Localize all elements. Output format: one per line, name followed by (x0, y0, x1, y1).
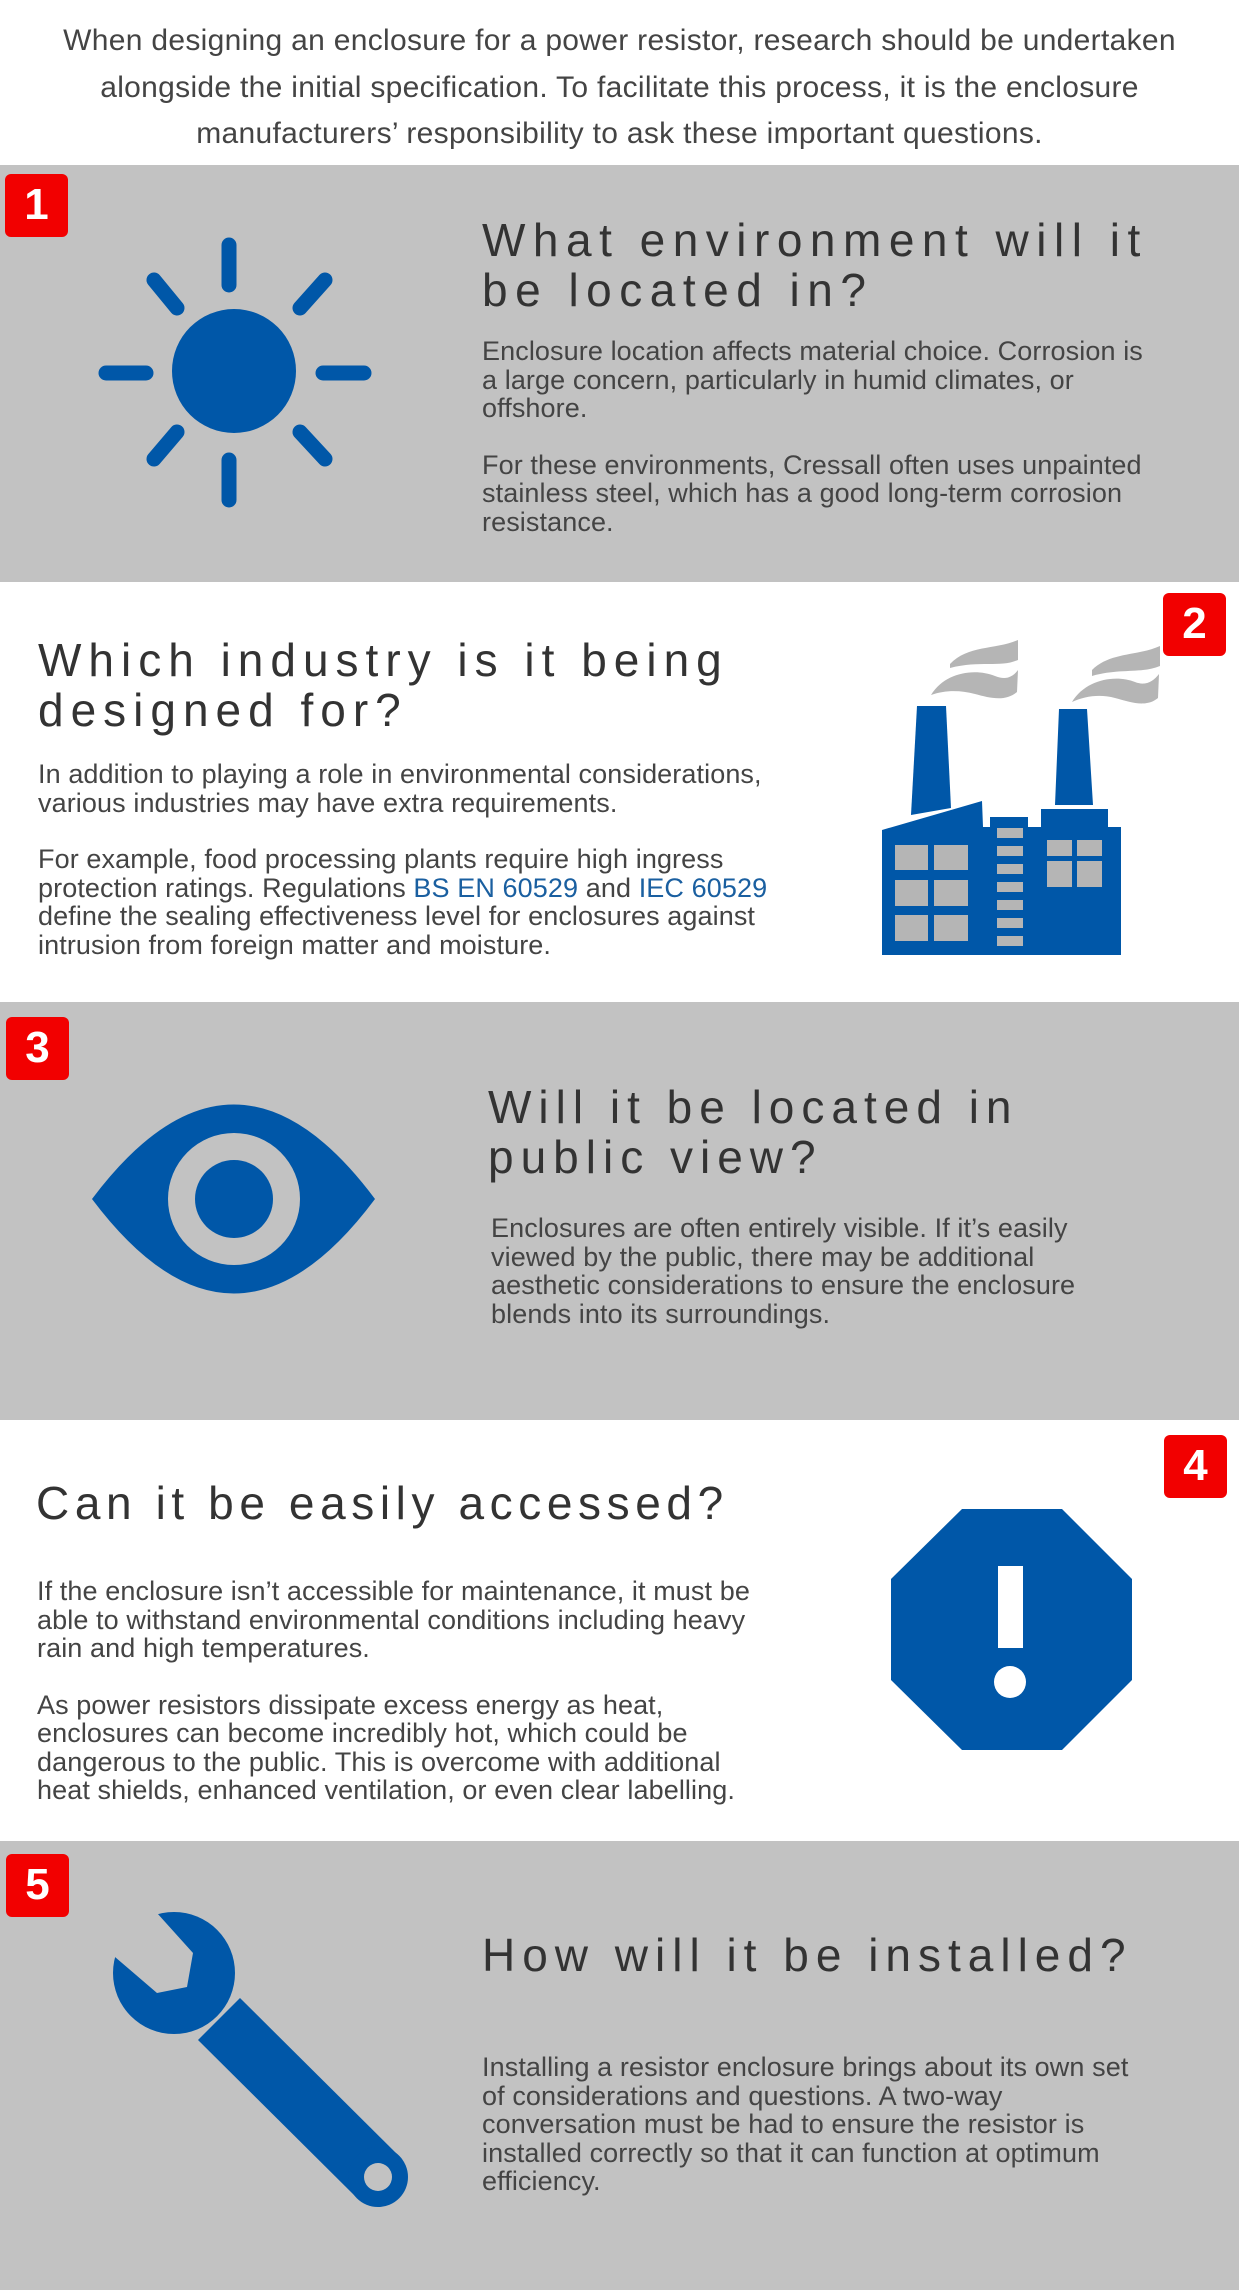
badge 5: 5 (25, 1860, 50, 1909)
intro text (63, 24, 1176, 150)
body text 1 (482, 336, 1143, 536)
heading 3: Will it be located in (488, 1081, 1018, 1133)
panel: access (36, 1435, 1227, 1805)
body text 1: stainless steel, which has a good long-term corrosion (482, 478, 1122, 508)
body text 5: of considerations and questions. A two-way (482, 2080, 1003, 2110)
icon: wrench (113, 1912, 408, 2207)
heading 1: What environment will it (482, 214, 1148, 266)
body text 2: For example, food processing plants require high ingress (38, 844, 723, 874)
body text 2: define the sealing effectiveness level for enclosures against (38, 901, 755, 931)
heading 3 (488, 1081, 1018, 1183)
body text 4: If the enclosure isn’t accessible for maintenance, it must be (37, 1576, 750, 1606)
body text 1: a large concern, particularly in humid climates, or (482, 364, 1074, 394)
body text 1: Enclosure location affects material choice. Corrosion is (482, 336, 1143, 366)
intro text: alongside the initial specification. To facilitate this process, it is the enclosure (100, 70, 1139, 104)
heading 2: Which industry is it being (38, 634, 729, 686)
body text 5: installed correctly so that it can function at optimum (482, 2138, 1100, 2168)
panel: public view (0, 1002, 1239, 1420)
body text 4: dangerous to the public. This is overcome with additional (37, 1746, 721, 1776)
body text 5: Installing a resistor enclosure brings about its own set (482, 2052, 1128, 2082)
intro text: manufacturers’ responsibility to ask these important questions. (196, 117, 1043, 150)
panel: installation (0, 1841, 1239, 2290)
body text 2: In addition to playing a role in environmental considerations, (38, 759, 762, 789)
heading 2 (38, 634, 729, 736)
body text 2: intrusion from foreign matter and moisture. (38, 930, 551, 960)
body text 3: Enclosures are often entirely visible. If it’s easily (491, 1213, 1068, 1243)
body text 5: efficiency. (482, 2166, 601, 2196)
badge 5 (6, 1854, 69, 1917)
intro text: When designing an enclosure for a power resistor, research should be undertaken (63, 24, 1176, 57)
icon: factory (882, 640, 1160, 955)
icon: warning octagon (891, 1509, 1132, 1750)
badge 3: 3 (25, 1023, 50, 1072)
body text 1: For these environments, Cressall often uses unpainted (482, 450, 1142, 480)
badge 4: 4 (1183, 1441, 1208, 1490)
badge 1: 1 (24, 180, 49, 229)
heading 5: How will it be installed? (482, 1929, 1133, 1981)
body text 4 (37, 1576, 750, 1805)
badge 4 (1164, 1435, 1227, 1498)
body text 1: resistance. (482, 506, 614, 536)
body text 3: blends into its surroundings. (491, 1298, 830, 1328)
body text 4: able to withstand environmental conditions including heavy (37, 1604, 745, 1634)
heading 3: public view? (488, 1131, 823, 1183)
panel: industry (38, 593, 1226, 960)
heading 1: be located in? (482, 264, 873, 316)
icon: eye (92, 1104, 375, 1294)
body text 2: protection ratings. Regulations BS EN 60529 and IEC 60529 (38, 872, 767, 902)
body text 4: enclosures can become incredibly hot, which could be (37, 1718, 688, 1748)
body text 3: aesthetic considerations to ensure the enclosure (491, 1270, 1075, 1300)
heading 4: Can it be easily accessed? (36, 1477, 729, 1529)
panel: environment (0, 165, 1239, 582)
body text 4: As power resistors dissipate excess energy as heat, (37, 1690, 663, 1720)
badge 3 (6, 1017, 69, 1080)
body text 3: viewed by the public, there may be additional (491, 1242, 1034, 1272)
heading 1 (482, 214, 1148, 316)
badge 1 (5, 174, 68, 237)
body text 3 (491, 1213, 1075, 1328)
heading 2: designed for? (38, 684, 408, 736)
body text 2 (38, 759, 767, 960)
body text 5: conversation must be had to ensure the resistor is (482, 2109, 1084, 2139)
body text 4: rain and high temperatures. (37, 1633, 370, 1663)
badge 2 (1163, 593, 1226, 656)
body text 2: various industries may have extra requirements. (38, 788, 617, 818)
body text 4: heat shields, enhanced ventilation, or even clear labelling. (37, 1775, 735, 1805)
badge 2: 2 (1182, 599, 1207, 648)
body text 5 (482, 2052, 1128, 2196)
body text 1: offshore. (482, 393, 587, 423)
icon: sun (98, 238, 372, 508)
